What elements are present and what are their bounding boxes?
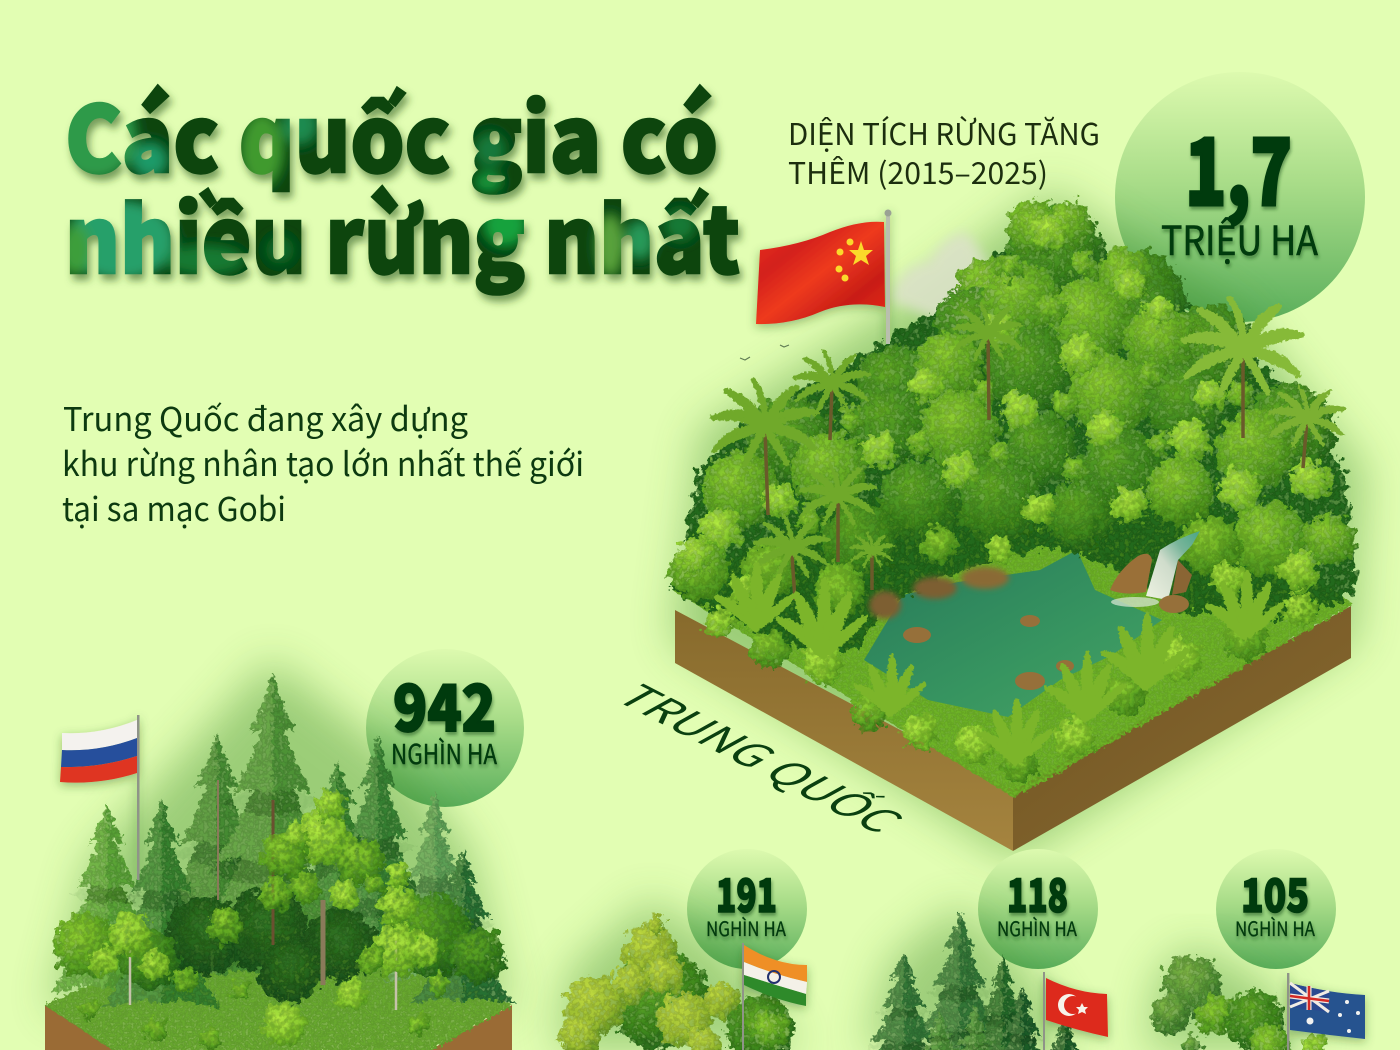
flag: Türkiye [1043,972,1108,1050]
subtitle text: Trung Quốc đang xây dựng [63,393,468,441]
panel: Russia forest [44,660,516,1050]
dark understory mass [53,888,506,1002]
waterfall and rocks [1110,531,1200,613]
value: Russia 942 thousand ha: 942 [393,658,496,750]
value: China 1,7 million ha: TRIỆU HA [1161,209,1319,267]
value: Türkiye 118 thousand ha: 118 [1007,860,1068,926]
birds [740,345,789,360]
title [65,67,740,300]
shore stones [869,567,1009,619]
conifers [860,912,1083,1050]
value circle: Australia disc [1216,849,1336,969]
value circle: China disc [1115,72,1365,322]
flag: Australia [1287,973,1365,1050]
island soft shadow [672,190,1365,860]
conifers back [50,672,516,1009]
value: Russia 942 thousand ha: NGHÌN HA [391,733,497,772]
value: Türkiye 118 thousand ha [997,860,1078,942]
title: nhiều rừng nhất [65,168,740,300]
label: forest area increase [788,110,1100,193]
halo [1145,945,1320,1050]
panel: Australia forest [1145,945,1326,1050]
value: India 191 thousand ha: NGHÌN HA [706,913,787,942]
panel: India forest [555,900,800,1050]
broadleaf trees [81,789,451,1050]
ferns [717,564,1283,764]
soil faces [675,606,1351,851]
subtitle text: tại sa mạc Gobi [62,483,286,531]
shore and lake rocks [869,567,1074,690]
foliage [560,916,794,1050]
trunks [130,780,396,1010]
value: China 1,7 million ha [1161,99,1319,267]
value: India 191 thousand ha [706,860,787,942]
value: Australia 105 thousand ha: 105 [1241,860,1309,926]
country label: China: TRUNG QUỐC [601,674,923,841]
front grass bushes [704,590,1318,783]
panel: Türkiye forest [860,905,1083,1050]
foliage [1150,955,1326,1050]
value circle: Russia disc [366,649,524,807]
value: Australia 105 thousand ha [1235,860,1316,942]
halo [555,900,800,1050]
forest canopy [670,200,1358,650]
flag: Russia [60,715,140,880]
value: Türkiye 118 thousand ha: NGHÌN HA [997,913,1078,942]
forest halo [50,660,510,1010]
title: Các quốc gia có [65,67,718,199]
label: forest area increase: THÊM (2015–2025) [788,149,1048,193]
halo [865,905,1080,1050]
subtitle text: khu rừng nhân tạo lớn nhất thế giới [62,438,584,486]
palms [712,299,1344,576]
lake stones [903,615,1074,690]
value circle: India disc [687,849,807,969]
subtitle text [62,393,584,531]
value circle: Türkiye disc [978,849,1098,969]
value: China 1,7 million ha: 1,7 [1185,99,1292,232]
palm trunks [765,335,1307,600]
value: India 191 thousand ha: 191 [716,860,777,926]
soil and grass [44,900,513,1050]
lake [864,550,1162,717]
label: forest area increase: DIỆN TÍCH RỪNG TĂNG [788,110,1100,154]
cloud [890,232,996,330]
panel: China forest island [670,190,1365,860]
value: Australia 105 thousand ha: NGHÌN HA [1235,913,1316,942]
flag: China [756,210,892,344]
grass top [672,500,1354,798]
flag: India [742,943,807,1050]
